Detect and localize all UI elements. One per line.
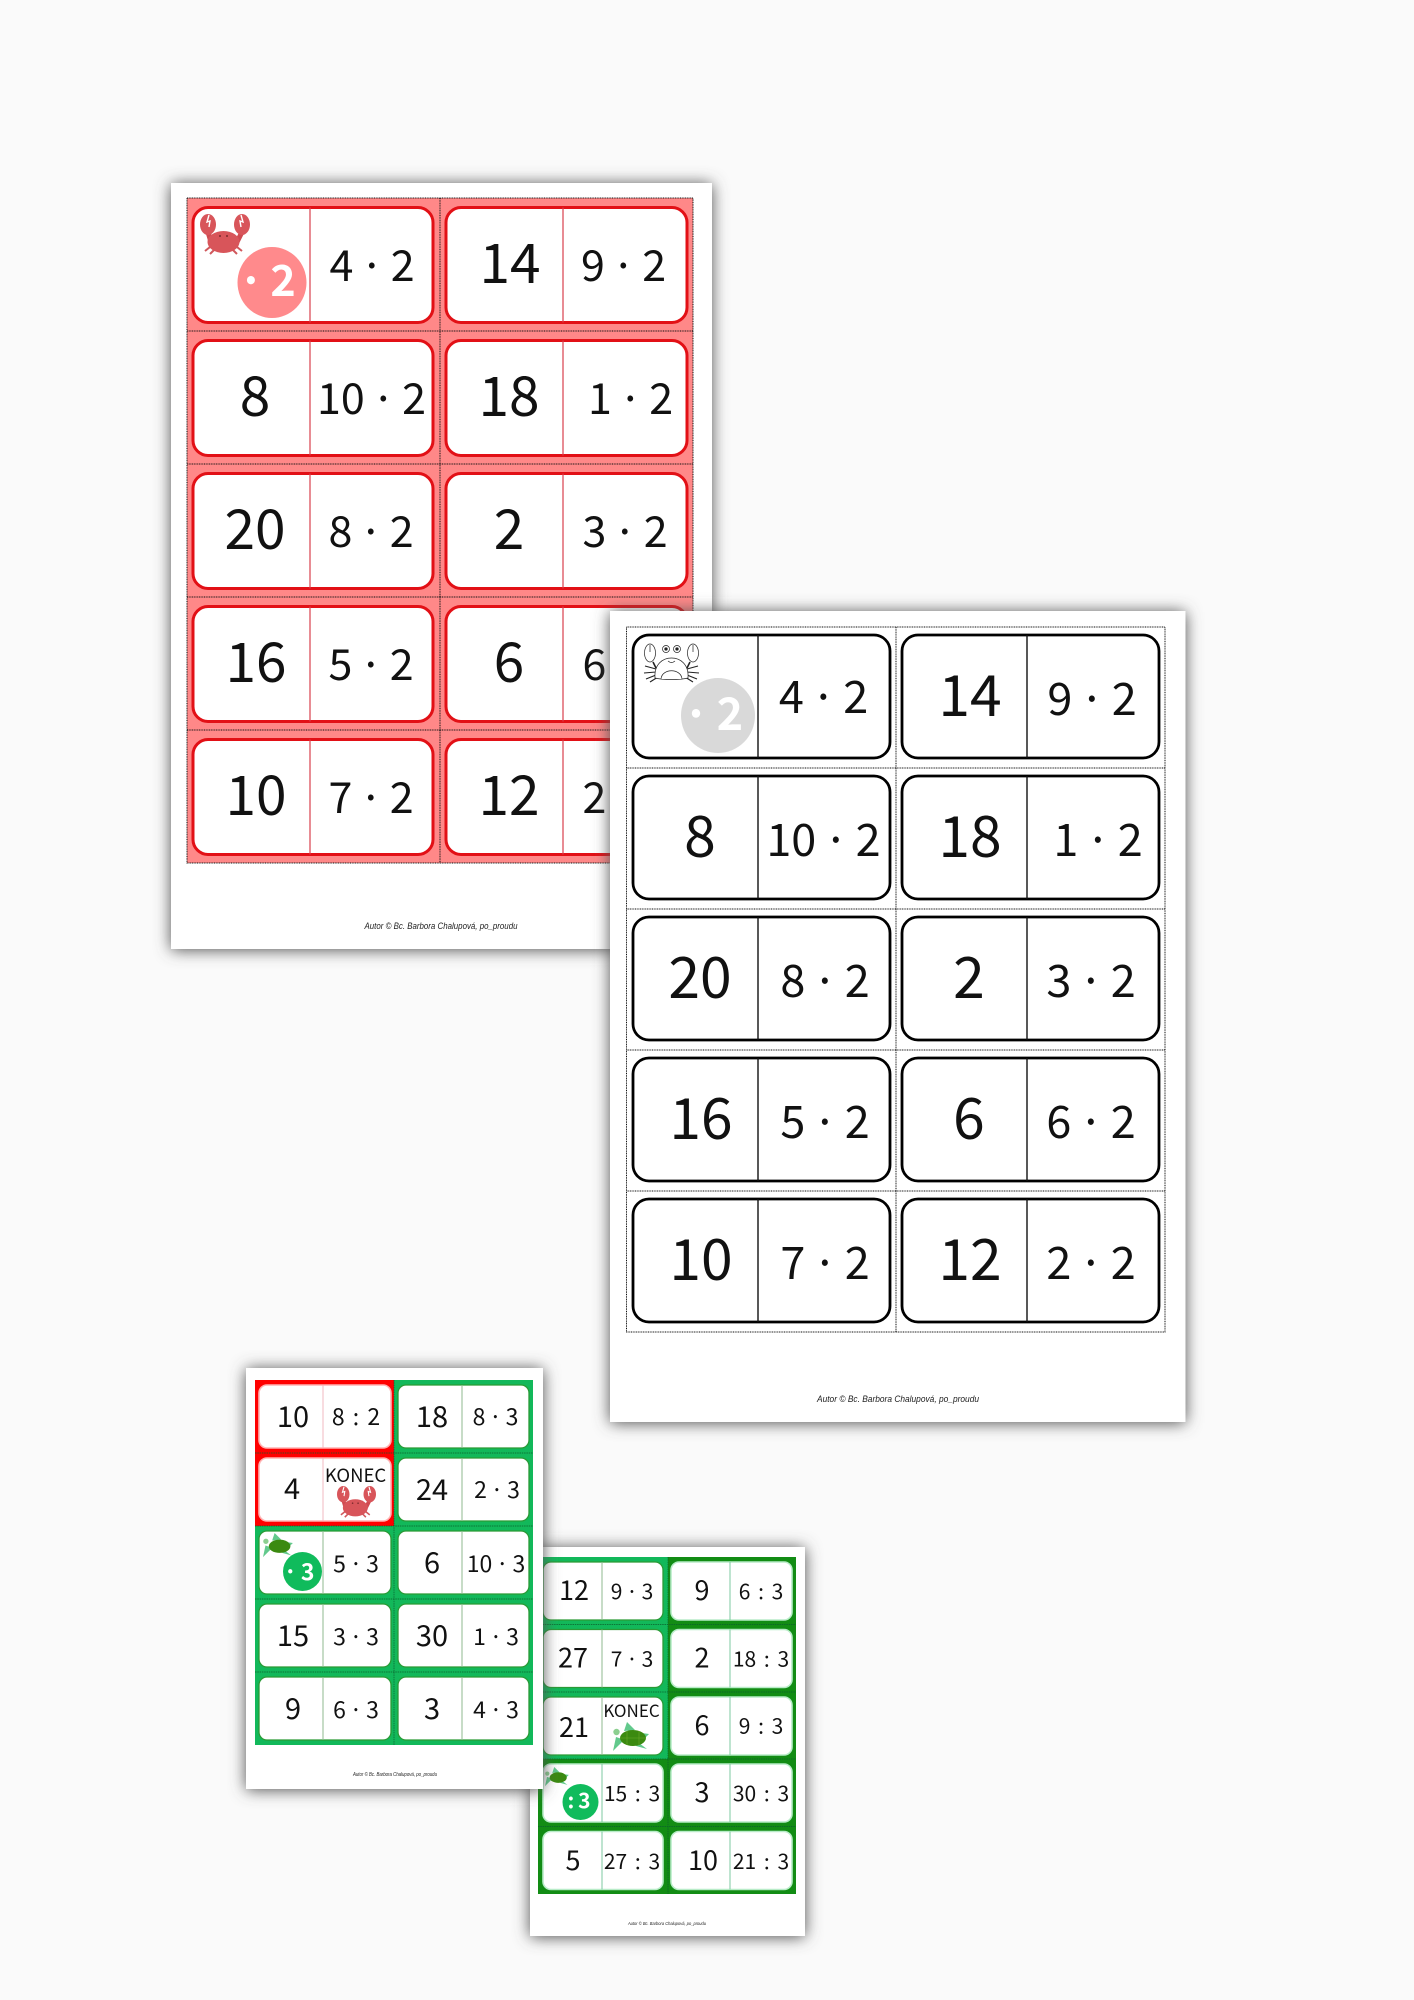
card: 12, 9 · 3: 12	[559, 1569, 589, 1608]
panel: dark green domino sheet, division by 3	[530, 1547, 805, 1936]
card: 15, 3 · 3: 15	[277, 1613, 309, 1655]
card: 21, end with turtle	[543, 1697, 663, 1755]
icon: red crab	[200, 214, 250, 254]
card: 5, 27 : 3	[543, 1832, 663, 1890]
card: 4, end with crab: 4	[284, 1466, 300, 1508]
card: 6, 9 : 3	[671, 1697, 792, 1755]
panel: black and white domino sheet, multiplication by 2	[610, 611, 1186, 1422]
card: 20, 8 · 2: 20	[224, 485, 286, 565]
card: 16, 5 · 2: 16	[225, 618, 287, 698]
card: 12, 9 · 3: 9 · 3	[611, 1576, 653, 1606]
card: 3, 4 · 3: 3	[424, 1686, 440, 1728]
card: outline crab start, 4 · 2: 4 · 2	[779, 661, 868, 726]
footer: author credit: Autor © Bc. Barbora Chalupová, po_proudu	[816, 1394, 980, 1405]
badge: times 2: · 2	[683, 678, 743, 743]
card: 5, 27 : 3: 27 : 3	[604, 1846, 660, 1876]
card: 6, 10 · 3	[398, 1531, 529, 1594]
badge: times 3: · 3	[284, 1553, 314, 1587]
card: 2, 3 · 2	[446, 474, 687, 588]
card: 16, 5 · 2	[193, 606, 433, 722]
card: 6, 10 · 3: 10 · 3	[467, 1545, 525, 1579]
footer: author credit: Autor © Bc. Barbora Chalupová, po_proudu	[352, 1771, 437, 1778]
card: turtle start, 15 : 3	[543, 1764, 663, 1822]
card: 8, 10 · 2: 10 · 2	[766, 804, 881, 869]
card: 9, 6 : 3: 6 : 3	[739, 1576, 783, 1606]
card: 9, 6 · 3	[259, 1677, 391, 1740]
card: 4, end with crab: KONEC	[325, 1462, 386, 1488]
card: 10, 21 : 3: 10	[688, 1839, 718, 1878]
card: 8, 10 · 2	[633, 776, 890, 899]
card: 10, 7 · 2	[193, 740, 433, 854]
card: 10, 7 · 2: 10	[225, 751, 287, 831]
card: 2, 18 : 3: 2	[694, 1636, 710, 1676]
card: 12, 2 · 2: 2 · 2	[582, 764, 668, 826]
card: 14, 9 · 2: 9 · 2	[1047, 663, 1137, 728]
card: 12, 2 · 2	[446, 740, 687, 854]
card: 16, 5 · 2	[633, 1058, 890, 1181]
icon: small green turtle	[545, 1767, 569, 1786]
footer: author credit: Autor © Bc. Barbora Chalupová, po_proudu	[364, 921, 518, 931]
card: 3, 4 · 3	[398, 1677, 529, 1740]
card: 15, 3 · 3: 3 · 3	[333, 1618, 379, 1652]
card: 18, 1 · 2: 1 · 2	[588, 365, 673, 427]
card: 3, 30 : 3: 3	[694, 1771, 710, 1810]
card: 20, 8 · 2	[193, 474, 433, 588]
card: 2, 3 · 2: 2	[494, 485, 524, 565]
card: 10, 7 · 2	[633, 1199, 890, 1322]
card: 12, 2 · 2: 12	[938, 1215, 1002, 1297]
card: 3, 30 : 3: 30 : 3	[733, 1778, 789, 1808]
card: 14, 9 · 2: 9 · 2	[581, 232, 666, 294]
card: turtle start, 15 : 3: 15 : 3	[604, 1778, 660, 1808]
card: 10, 8 : 2: 10	[277, 1394, 309, 1436]
badge: divide by 3: : 3	[568, 1785, 590, 1815]
card: 18, 1 · 2	[902, 776, 1159, 899]
card: 20, 8 · 2: 20	[668, 933, 732, 1015]
card: 6, 6 · 2: 6 · 2	[1046, 1086, 1136, 1151]
card: 6, 10 · 3: 6	[424, 1540, 440, 1582]
card: turtle start, 5 · 3	[259, 1531, 391, 1594]
card: 30, 1 · 3: 30	[416, 1613, 448, 1655]
card: 18, 1 · 2: 18	[938, 792, 1002, 874]
card: 21, end with turtle: KONEC	[603, 1697, 660, 1722]
card: 10, 21 : 3: 21 : 3	[733, 1846, 789, 1876]
card: 24, 2 · 3: 24	[416, 1467, 448, 1509]
card: 10, 7 · 2: 7 · 2	[780, 1227, 870, 1292]
card: 27, 7 · 3: 7 · 3	[611, 1644, 653, 1674]
card: 21, end with turtle: 21	[559, 1706, 589, 1745]
card: 8, 10 · 2: 8	[684, 792, 716, 874]
card: 14, 9 · 2: 14	[938, 651, 1002, 733]
card: 27, 7 · 3	[543, 1630, 663, 1688]
card: 18, 1 · 2	[446, 340, 687, 456]
card: 6, 6 · 2: 6	[494, 618, 524, 698]
card: crab start, 4 · 2: 4 · 2	[329, 232, 415, 294]
card: 10, 8 : 2: 8 : 2	[332, 1398, 380, 1432]
card: 3, 30 : 3	[671, 1764, 792, 1822]
card: 27, 7 · 3: 27	[558, 1636, 588, 1676]
card: crab start, 4 · 2	[193, 208, 433, 322]
card: 30, 1 · 3: 1 · 3	[473, 1618, 519, 1652]
icon: outline crab	[644, 644, 699, 682]
card: 6, 6 · 2	[446, 606, 687, 722]
card: 6, 6 · 2: 6 · 2	[582, 631, 668, 693]
card: 2, 18 : 3	[671, 1630, 792, 1688]
card: 16, 5 · 2: 5 · 2	[780, 1086, 870, 1151]
card: 18, 8 · 3: 8 · 3	[473, 1398, 518, 1432]
card: 2, 3 · 2: 3 · 2	[582, 498, 668, 560]
card: 6, 9 : 3: 6	[694, 1704, 710, 1743]
panel: red domino sheet, multiplication by 2	[171, 183, 712, 949]
card: 24, 2 · 3	[398, 1458, 529, 1521]
card: 9, 6 : 3: 9	[694, 1569, 710, 1608]
card: 12, 9 · 3	[543, 1562, 663, 1620]
card: 30, 1 · 3	[398, 1604, 529, 1667]
card: 14, 9 · 2	[446, 208, 687, 322]
card: 8, 10 · 2: 10 · 2	[317, 365, 426, 427]
card: 2, 3 · 2: 3 · 2	[1046, 945, 1136, 1010]
card: 9, 6 · 3: 9	[285, 1686, 301, 1728]
card: 18, 1 · 2: 1 · 2	[1053, 804, 1143, 869]
card: 3, 4 · 3: 4 · 3	[473, 1691, 519, 1725]
card: 8, 10 · 2: 8	[240, 352, 270, 432]
card: 20, 8 · 2	[633, 917, 890, 1040]
card: 16, 5 · 2: 5 · 2	[328, 631, 414, 693]
card: 2, 18 : 3: 18 : 3	[733, 1644, 789, 1674]
card: outline crab start, 4 · 2	[633, 635, 890, 758]
icon: green turtle	[263, 1533, 293, 1557]
card: turtle start, 5 · 3: 5 · 3	[333, 1545, 379, 1579]
card: 6, 6 · 2	[902, 1058, 1159, 1181]
card: 12, 2 · 2: 2 · 2	[1046, 1227, 1136, 1292]
badge: times 2: · 2	[238, 247, 296, 309]
card: 12, 2 · 2: 12	[478, 751, 540, 831]
card: 5, 27 : 3: 5	[566, 1839, 580, 1878]
card: 6, 9 : 3: 9 : 3	[739, 1710, 783, 1740]
card: 15, 3 · 3	[259, 1604, 391, 1667]
card: 10, 7 · 2: 7 · 2	[328, 764, 414, 826]
card: 14, 9 · 2	[902, 635, 1159, 758]
card: 12, 2 · 2	[902, 1199, 1159, 1322]
icon: green turtle	[613, 1722, 649, 1751]
card: 6, 6 · 2: 6	[953, 1074, 985, 1156]
icon: red crab	[337, 1486, 376, 1517]
card: 16, 5 · 2: 16	[669, 1074, 733, 1156]
card: 20, 8 · 2: 8 · 2	[780, 945, 870, 1010]
card: 8, 10 · 2	[193, 340, 433, 456]
card: 2, 3 · 2: 2	[953, 933, 985, 1015]
card: 10, 7 · 2: 10	[669, 1215, 733, 1297]
card: 10, 21 : 3	[671, 1832, 792, 1890]
card: 14, 9 · 2: 14	[479, 219, 541, 299]
card: 9, 6 · 3: 6 · 3	[333, 1691, 379, 1725]
card: 20, 8 · 2: 8 · 2	[328, 498, 414, 560]
card: 9, 6 : 3	[671, 1562, 792, 1620]
card: 10, 8 : 2	[259, 1385, 391, 1448]
card: 18, 8 · 3: 18	[416, 1394, 448, 1436]
card: 24, 2 · 3: 2 · 3	[474, 1471, 520, 1505]
footer: author credit: Autor © Bc. Barbora Chalupová, po_proudu	[627, 1920, 706, 1927]
card: 2, 3 · 2	[902, 917, 1159, 1040]
card: 18, 8 · 3	[398, 1385, 529, 1448]
panel: green domino sheet, multiplication by 3	[246, 1368, 543, 1789]
card: 18, 1 · 2: 18	[478, 352, 540, 432]
card: 4, end with crab	[259, 1458, 391, 1521]
